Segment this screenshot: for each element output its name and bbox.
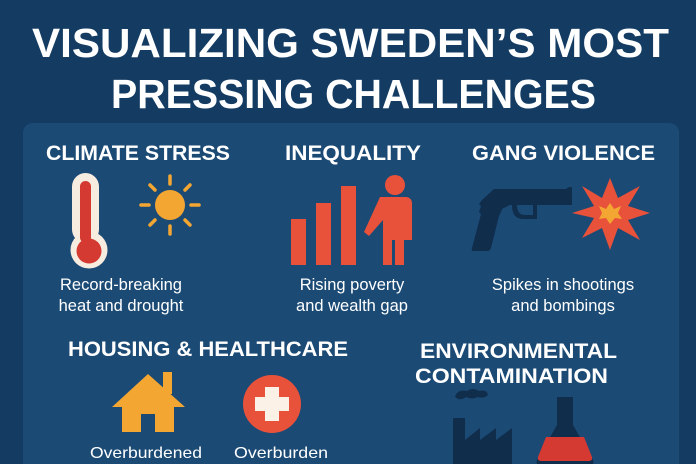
heading: gang violence: GANG VIOLENCE [472,142,655,165]
heading: environmental contamination: CONTAMINATION [415,365,608,388]
text: climate caption: heat and drought [59,297,184,315]
icon: flask [537,397,593,464]
title: PRESSING CHALLENGES [111,71,596,117]
title: VISUALIZING SWEDEN’S MOST [32,20,669,66]
heading: housing & healthcare: HOUSING & HEALTHCARE [68,338,348,361]
title [32,20,669,117]
text: climate caption [59,276,184,315]
icon: bar chart with person [291,175,412,265]
text: housing captions: Overburden [234,445,328,462]
icon: factory [453,389,512,464]
panel: main [23,123,679,464]
icon: house [112,372,185,432]
text: inequality caption [296,276,408,315]
heading: inequality: INEQUALITY [285,142,421,165]
text: inequality caption: Rising poverty [300,276,405,294]
heading: environmental contamination [415,340,617,388]
icon: explosion [572,178,650,250]
text: gang caption: and bombings [511,297,615,315]
heading: environmental contamination: ENVIRONMENTAL [420,340,617,363]
icon: medical cross [243,375,301,433]
text: inequality caption: and wealth gap [296,297,408,315]
text: housing captions: Overburdened [90,445,202,462]
text: gang caption: Spikes in shootings [492,276,634,294]
text: housing captions [90,445,328,462]
icon: sun [141,176,199,234]
text: climate caption: Record-breaking [60,276,182,294]
icon: thermometer [70,173,108,268]
heading: climate stress: CLIMATE STRESS [46,142,230,165]
icon: gun [472,187,572,251]
text: gang caption [492,276,634,315]
